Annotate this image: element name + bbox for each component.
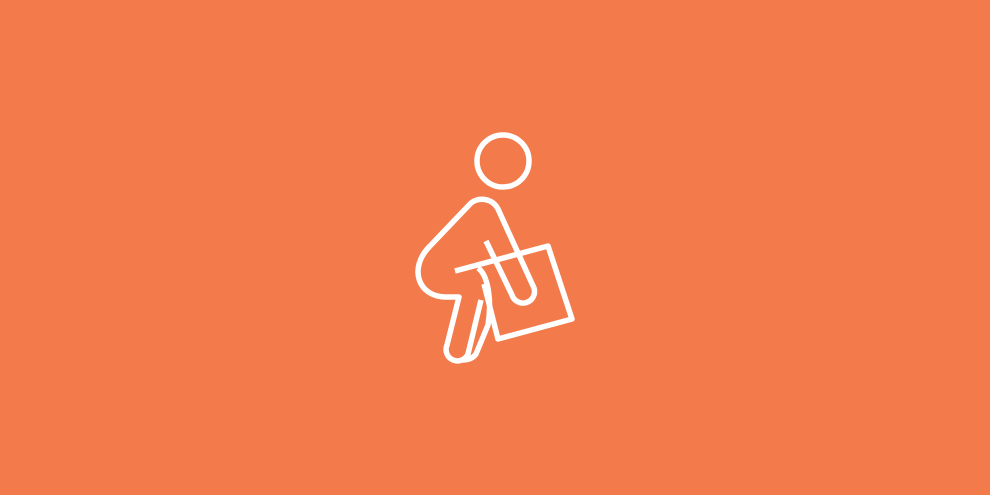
icon: body and arm xyxy=(418,199,535,361)
icon: second leg xyxy=(462,268,490,360)
icon: head xyxy=(477,135,529,187)
icon: box xyxy=(455,246,572,339)
